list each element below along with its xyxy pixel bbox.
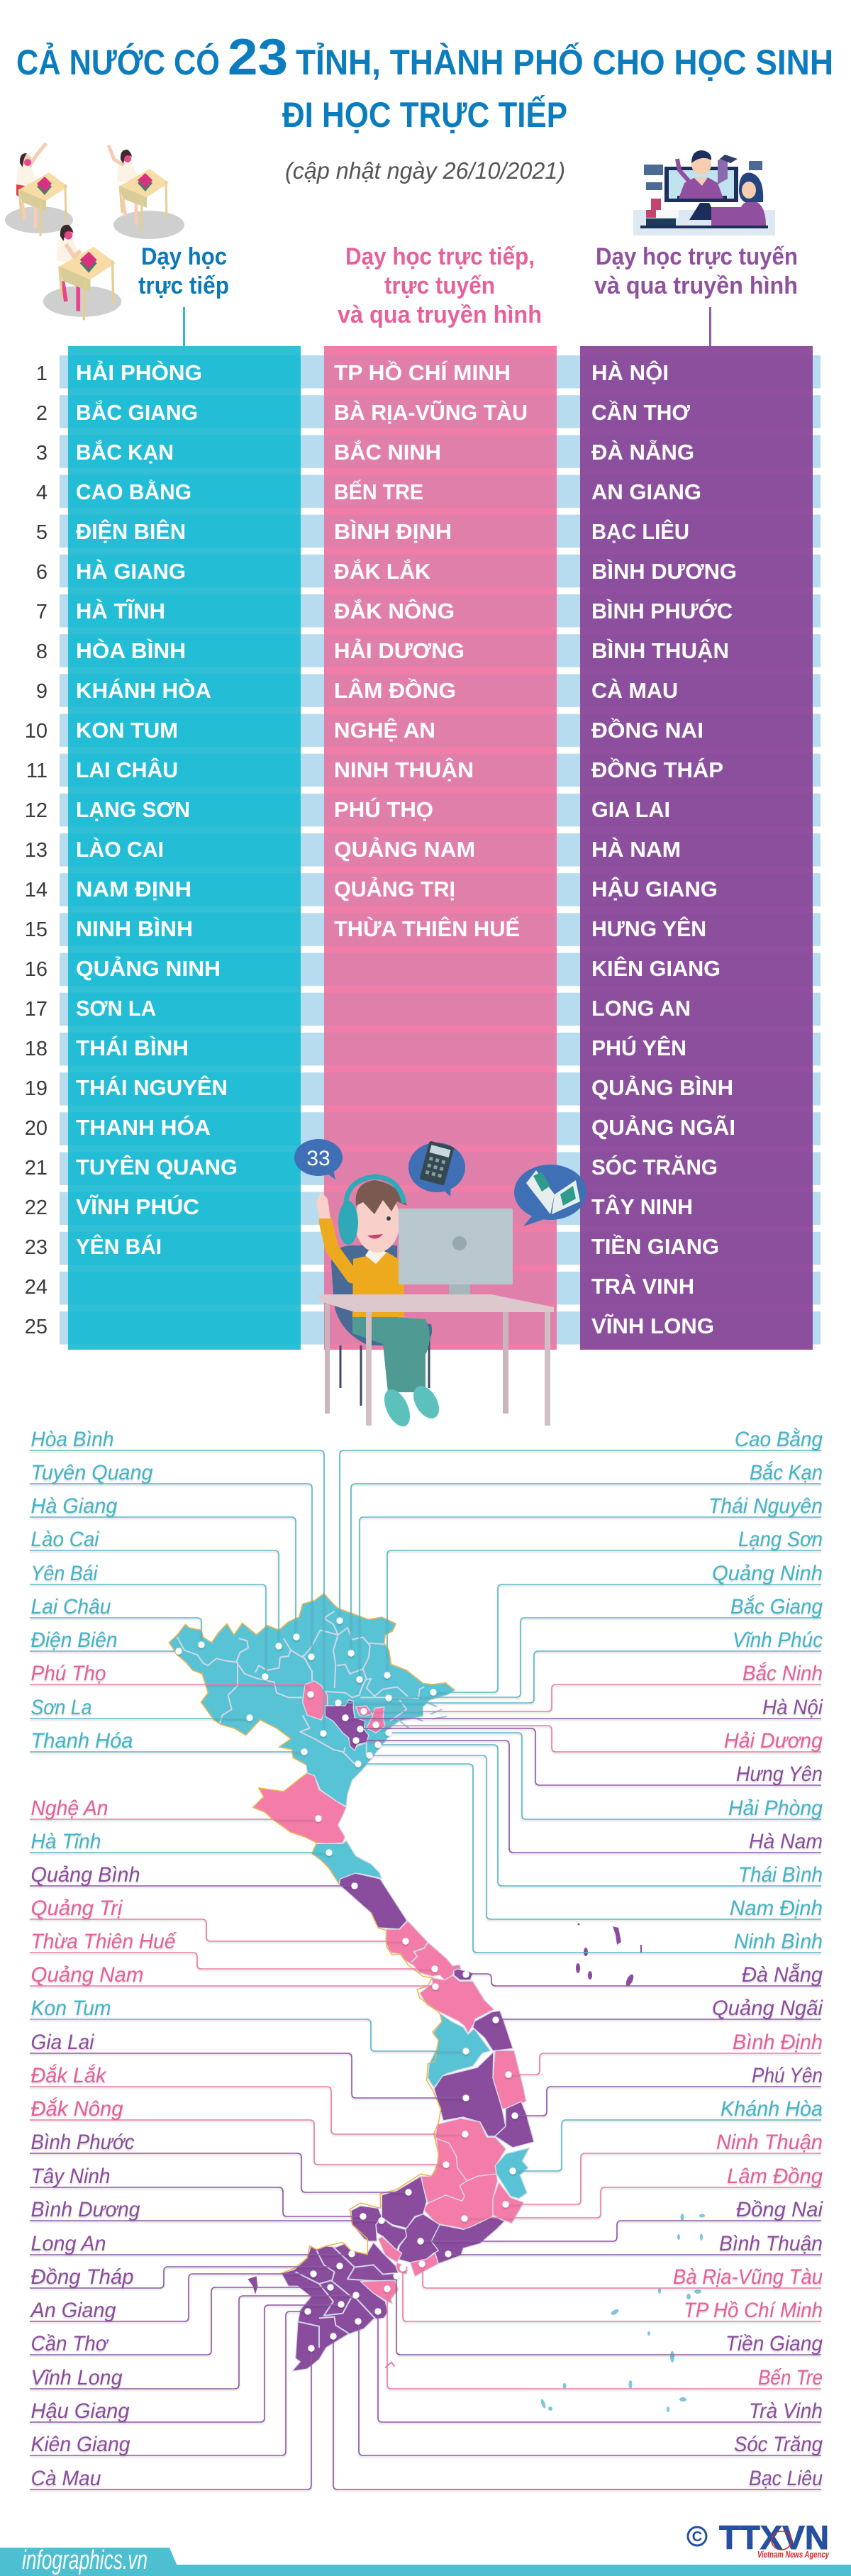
logo: TTXVN: C (692, 2529, 702, 2545)
label: Hậu Giang (30, 2301, 345, 2423)
label: Hà Tĩnh (30, 1830, 333, 1856)
label: Vĩnh Long (30, 2292, 360, 2389)
label: Gia Lai: Gia Lai (31, 2031, 95, 2054)
label: Ninh Thuận: Ninh Thuận (716, 2131, 823, 2154)
label: Thái Nguyên (356, 1494, 823, 1683)
label: Bắc Kạn: Bắc Kạn (750, 1461, 823, 1484)
panel: in-person provinces: TUYÊN QUANG (76, 1154, 238, 1179)
title (16, 29, 833, 135)
label: Trà Vinh: Trà Vinh (749, 2399, 823, 2423)
panel: online provinces: LONG AN (591, 996, 691, 1021)
column heading: in-person: Dạy học (141, 243, 227, 270)
label: Bình Thuận (445, 2232, 823, 2258)
panel: in-person provinces: VĨNH PHÚC (76, 1194, 199, 1219)
panel: online provinces: CÀ MAU (591, 678, 678, 703)
map legend: labels and leader lines (30, 1428, 823, 2490)
label: Bắc Giang: Bắc Giang (730, 1595, 823, 1619)
panel: in-person provinces: THÁI BÌNH (76, 1036, 189, 1060)
label: Kiên Giang: Kiên Giang (31, 2433, 130, 2456)
label: Đắk Nông: Đắk Nông (31, 2097, 123, 2121)
label: Quảng Ngãi: Quảng Ngãi (712, 1997, 823, 2020)
icon: book bubble (514, 1165, 586, 1226)
label: Phú Yên: Phú Yên (752, 2064, 823, 2087)
label: Thái Bình (374, 1741, 823, 1887)
row numbers: 15 (25, 918, 48, 941)
label: Quảng Ngãi (492, 1997, 823, 2023)
label: Bình Định (505, 2031, 823, 2078)
label: Bắc Kạn (347, 1461, 823, 1657)
title: CẢ NƯỚC CÓ (16, 43, 220, 82)
label: Sóc Trăng: Sóc Trăng (734, 2433, 823, 2456)
panel: online provinces: BÌNH PHƯỚC (591, 598, 733, 623)
label: Quảng Ninh (430, 1562, 823, 1696)
icon: student at desk, bottom (43, 225, 121, 320)
label: Bình Thuận: Bình Thuận (719, 2232, 823, 2255)
panel: blended provinces: PHÚ THỌ (334, 796, 433, 822)
panel: in-person provinces: HÀ GIANG (76, 559, 186, 584)
panel: in-person provinces: SƠN LA (76, 996, 156, 1021)
panel: online provinces: BẠC LIÊU (591, 518, 689, 544)
label: Ninh Thuận (502, 2131, 823, 2208)
panel: blended provinces: BẮC NINH (334, 439, 441, 465)
label: Bạc Liêu (330, 2333, 823, 2490)
label: Hà Tĩnh: Hà Tĩnh (31, 1830, 101, 1853)
panel: in-person provinces: HÀ TĨNH (76, 599, 165, 623)
panel: online provinces: KIÊN GIANG (591, 955, 721, 981)
label: Yên Bái: Yên Bái (31, 1562, 99, 1585)
label: Đắk Lắk (30, 2064, 469, 2138)
label: Tuyên Quang (30, 1461, 315, 1660)
label: Nam Định (366, 1752, 823, 1920)
row numbers: 24 (25, 1276, 48, 1299)
panel: blended provinces: ĐẮK LẮK (334, 558, 431, 584)
label: Sơn La: Sơn La (31, 1696, 92, 1719)
label: TP Hồ Chí Minh: TP Hồ Chí Minh (684, 2299, 823, 2322)
row numbers: 22 (25, 1197, 48, 1219)
label: Vĩnh Long: Vĩnh Long (31, 2366, 123, 2389)
label: Bà Rịa-Vũng Tàu (418, 2260, 823, 2289)
label: Cần Thơ (30, 2284, 334, 2355)
label: Cao Bằng: Cao Bằng (735, 1428, 823, 1451)
panel: blended provinces: LÂM ĐỒNG (334, 677, 456, 703)
label: Lào Cai: Lào Cai (31, 1528, 100, 1551)
label: Tây Ninh: Tây Ninh (31, 2165, 111, 2188)
label: Hà Nội (342, 1696, 823, 1721)
label: Phú Thọ (30, 1662, 314, 1698)
label: Hà Nam: Hà Nam (749, 1830, 823, 1853)
label: Long An: Long An (31, 2232, 106, 2255)
label: Bà Rịa-Vũng Tàu: Bà Rịa-Vũng Tàu (673, 2265, 823, 2289)
label: Đồng Tháp (30, 2263, 343, 2289)
map: northern provinces (169, 1594, 455, 1884)
panel: online provinces: BÌNH THUẬN (591, 638, 729, 663)
label: Phú Thọ: Phú Thọ (31, 1662, 106, 1685)
label: Kiên Giang (30, 2308, 311, 2456)
panel: online provinces: QUẢNG NGÃI (591, 1115, 735, 1140)
label: Thanh Hóa (30, 1729, 308, 1755)
label: Hải Phòng (385, 1729, 823, 1820)
panel: in-person provinces: QUẢNG NINH (76, 956, 221, 981)
panel: online provinces: HƯNG YÊN (591, 916, 706, 941)
label: Bến Tre: Bến Tre (758, 2366, 823, 2389)
title: ĐI HỌC TRỰC TIẾP (282, 95, 567, 135)
panel: in-person provinces: LAI CHÂU (76, 757, 178, 782)
label: Nghệ An (30, 1797, 322, 1822)
panel: in-person provinces: BẮC GIANG (76, 399, 198, 425)
panel: in-person provinces: HÒA BÌNH (76, 638, 186, 663)
panel: blended provinces: NINH THUẬN (334, 757, 474, 782)
panel: blended provinces: QUẢNG NAM (334, 837, 475, 862)
label: Đà Nẵng (462, 1963, 823, 1987)
label: Quảng Bình (30, 1863, 358, 1889)
icon: online teacher and student (633, 150, 775, 235)
label: Trà Vinh (374, 2308, 823, 2423)
label: Kon Tum: Kon Tum (31, 1997, 111, 2020)
label: Bình Phước (30, 2131, 412, 2196)
label: Bạc Liêu: Bạc Liêu (749, 2467, 823, 2490)
row numbers: 14 (25, 879, 48, 901)
panel: blended provinces: BẾN TRE (334, 479, 423, 504)
map: southern provinces (247, 2090, 530, 2371)
label: Cà Mau: Cà Mau (31, 2467, 101, 2490)
label: Lâm Đồng: Lâm Đồng (727, 2165, 823, 2188)
label: Bình Dương: Bình Dương (31, 2198, 140, 2221)
column heading: blended: trực tuyến (384, 272, 495, 299)
label: Hà Nam (352, 1737, 823, 1853)
row numbers: 5 (36, 521, 48, 544)
panel: online provinces: HÀ NAM (591, 837, 681, 862)
illustration: child studying at computer (294, 1139, 586, 1431)
label: Tiền Giang: Tiền Giang (725, 2332, 823, 2355)
panel: online provinces: AN GIANG (591, 479, 701, 504)
label: Lai Châu: Lai Châu (31, 1595, 111, 1619)
label: Khánh Hòa (509, 2097, 823, 2175)
label: Gia Lai (30, 2031, 469, 2102)
column heading: online (594, 243, 798, 299)
label: Phú Yên (511, 2064, 823, 2119)
panel: online provinces (580, 346, 813, 1350)
label: An Giang: An Giang (30, 2299, 116, 2322)
label: Vĩnh Phúc (335, 1628, 823, 1706)
panel: blended provinces: THỪA THIÊN HUẾ (334, 916, 520, 941)
panel: blended provinces: HẢI DƯƠNG (334, 638, 465, 663)
icon: speech bubble with 33: 33 (306, 1147, 330, 1170)
label: Bình Phước: Bình Phước (31, 2131, 135, 2154)
label: Hải Phòng: Hải Phòng (728, 1797, 823, 1820)
panel: online provinces: HẬU GIANG (591, 876, 718, 901)
label: Tiền Giang (393, 2272, 823, 2355)
panel: in-person provinces: KON TUM (76, 718, 178, 743)
row numbers: 1 (36, 362, 48, 385)
row numbers: 3 (36, 442, 48, 465)
label: Kon Tum (30, 1997, 469, 2055)
panel: in-person provinces: HẢI PHÒNG (76, 360, 202, 385)
connector stem: in-person (183, 307, 185, 346)
panel: in-person provinces: NAM ĐỊNH (76, 877, 191, 901)
label: Hải Dương: Hải Dương (724, 1729, 823, 1753)
panel: online provinces: TIỀN GIANG (591, 1234, 719, 1259)
row numbers: 25 (25, 1316, 48, 1338)
label: Hưng Yên: Hưng Yên (736, 1762, 823, 1786)
icon: calculator bubble (408, 1140, 465, 1197)
label: Thái Bình: Thái Bình (738, 1863, 823, 1887)
row numbers: 20 (25, 1117, 48, 1140)
panel: online provinces: BÌNH DƯƠNG (591, 559, 737, 584)
panel: online provinces: PHÚ YÊN (591, 1035, 686, 1060)
label: Bình Định: Bình Định (733, 2031, 823, 2054)
row numbers: 9 (36, 680, 48, 703)
computer monitor (399, 1209, 513, 1301)
label: Hà Giang: Hà Giang (31, 1494, 118, 1518)
label: Quảng Bình: Quảng Bình (31, 1863, 140, 1887)
map of Vietnam (169, 1594, 705, 2412)
label: Nghệ An: Nghệ An (31, 1797, 108, 1820)
panel: in-person provinces: YÊN BÁI (76, 1233, 162, 1259)
row numbers: 21 (25, 1157, 48, 1179)
row numbers: 6 (36, 561, 48, 584)
desk (318, 1294, 554, 1426)
label: Quảng Nam (30, 1963, 439, 1990)
row numbers: 13 (25, 839, 48, 862)
label: Hòa Bình: Hòa Bình (31, 1428, 113, 1451)
row numbers: 11 (26, 760, 48, 782)
label: Lai Châu (30, 1595, 205, 1648)
icon: student at desk, top middle (109, 145, 184, 239)
logo: TTXVN: TTXVN (719, 2519, 829, 2556)
panel: online provinces: TRÀ VINH (591, 1274, 694, 1299)
label: Hà Nội: Hà Nội (762, 1696, 823, 1719)
label: Đồng Tháp: Đồng Tháp (31, 2265, 133, 2289)
islands: Trường Sa (540, 2214, 705, 2412)
row numbers: 23 (25, 1236, 48, 1259)
panel: in-person provinces: THANH HÓA (76, 1114, 211, 1140)
row numbers: 10 (25, 720, 48, 743)
label: Đắk Lắk: Đắk Lắk (31, 2064, 107, 2087)
label: Quảng Trị: Quảng Trị (31, 1897, 123, 1920)
row numbers: 8 (36, 640, 48, 663)
label: Nam Định: Nam Định (730, 1897, 823, 1920)
row numbers: 12 (25, 799, 48, 822)
label: Quảng Ninh: Quảng Ninh (712, 1562, 823, 1585)
row stripes (60, 355, 821, 1345)
column heading: blended: Dạy học trực tiếp, (345, 243, 535, 270)
subtitle: update date: (cập nhật ngày 26/10/2021) (285, 157, 565, 184)
map: central provinces (371, 1913, 513, 2090)
panel: in-person provinces: CAO BẰNG (76, 479, 191, 504)
row numbers: 4 (36, 482, 48, 504)
row numbers: 16 (25, 958, 48, 981)
panel: online provinces: SÓC TRĂNG (591, 1154, 718, 1179)
panel: online provinces: CẦN THƠ (591, 400, 691, 425)
label: Bến Tre (384, 2285, 823, 2389)
label: Hải Dương (372, 1721, 823, 1753)
label: Đồng Nai: Đồng Nai (736, 2198, 823, 2221)
panel: blended provinces: QUẢNG TRỊ (334, 877, 455, 901)
column heading: in-person: trực tiếp (138, 272, 229, 299)
child figure (316, 1177, 444, 1431)
label: Thừa Thiên Huế (30, 1930, 438, 1972)
label: Bình Dương (30, 2198, 385, 2224)
islands: Hoàng Sa (576, 1923, 642, 1987)
label: Sóc Trăng (355, 2318, 823, 2456)
label: Đắk Nông (30, 2097, 450, 2168)
label: Bắc Giang (385, 1595, 823, 1701)
label: Thái Nguyên: Thái Nguyên (708, 1494, 823, 1518)
panel: in-person provinces: THÁI NGUYÊN (76, 1075, 228, 1100)
label: Cao Bằng (336, 1428, 823, 1624)
footer bar: infographics.vn (22, 2546, 148, 2575)
panel: online provinces: HÀ NỘI (591, 360, 669, 385)
panel: in-person provinces (68, 346, 301, 1350)
panel: in-person provinces: KHÁNH HÒA (76, 677, 211, 703)
map: north central provinces (339, 1873, 407, 1929)
label: Ninh Bình: Ninh Bình (734, 1930, 823, 1953)
panel: online provinces: VĨNH LONG (591, 1314, 714, 1338)
panel: online provinces: TÂY NINH (591, 1194, 693, 1219)
panel: in-person provinces: ĐIỆN BIÊN (76, 518, 186, 544)
label: TP Hồ Chí Minh (399, 2265, 823, 2322)
label: Ninh Bình (355, 1760, 823, 1953)
label: Vĩnh Phúc: Vĩnh Phúc (733, 1628, 823, 1652)
column heading: online: và qua truyền hình (594, 272, 798, 299)
panel: in-person provinces: LẠNG SƠN (76, 797, 190, 822)
panel: in-person provinces: NINH BÌNH (76, 916, 193, 941)
icon: speech bubble with 33 (294, 1139, 343, 1179)
column heading: blended (338, 243, 542, 328)
label: Lạng Sơn (384, 1528, 823, 1679)
chair (331, 1245, 432, 1406)
panel: blended provinces (324, 346, 557, 1350)
label: Quảng Nam: Quảng Nam (31, 1963, 143, 1987)
label: Bắc Ninh: Bắc Ninh (742, 1662, 823, 1685)
footer bar (0, 2546, 851, 2576)
label: Khánh Hòa: Khánh Hòa (721, 2097, 823, 2121)
label: Sơn La (30, 1696, 253, 1721)
panel: blended provinces: BÌNH ĐỊNH (334, 519, 452, 544)
label: Đà Nẵng: Đà Nẵng (742, 1963, 823, 1987)
label: Hòa Bình (30, 1428, 327, 1737)
label: Thừa Thiên Huế: Thừa Thiên Huế (31, 1930, 177, 1953)
label: Đồng Nai (417, 2198, 823, 2245)
column heading: online: Dạy học trực tuyến (596, 243, 798, 270)
label: Long An (30, 2232, 355, 2258)
icon: student at desk, top left (5, 143, 73, 236)
connector stem: online (709, 307, 711, 346)
column heading: blended: và qua truyền hình (338, 301, 542, 328)
row numbers: 17 (25, 998, 48, 1021)
label: Cà Mau (30, 2345, 315, 2490)
label: Hưng Yên (357, 1726, 823, 1786)
label: Tuyên Quang: Tuyên Quang (31, 1461, 153, 1484)
label: Hậu Giang: Hậu Giang (31, 2399, 130, 2423)
panel: blended provinces: ĐẮK NÔNG (334, 598, 455, 623)
row numbers: 19 (25, 1077, 48, 1100)
panel: online provinces: ĐỒNG NAI (591, 717, 703, 743)
panel: online provinces: GIA LAI (591, 797, 670, 822)
column heading: in-person (138, 243, 229, 299)
panel: blended provinces: NGHỆ AN (334, 717, 435, 743)
label: Lạng Sơn: Lạng Sơn (738, 1528, 823, 1551)
label: Quảng Trị (30, 1897, 409, 1945)
label: Lào Cai (30, 1528, 282, 1650)
row numbers (25, 362, 48, 1338)
label: Lâm Đồng (461, 2165, 823, 2222)
label: Điện Biên (30, 1628, 182, 1655)
panel: online provinces: QUẢNG BÌNH (591, 1075, 733, 1100)
row numbers: 18 (25, 1038, 48, 1060)
row numbers: 7 (36, 601, 48, 623)
label: Cần Thơ: Cần Thơ (31, 2332, 109, 2355)
label: Thanh Hóa: Thanh Hóa (31, 1729, 133, 1753)
row numbers: 2 (36, 402, 48, 425)
panel: blended provinces: BÀ RỊA-VŨNG TÀU (334, 399, 528, 425)
label: Điện Biên: Điện Biên (31, 1628, 118, 1652)
panel: online provinces: ĐỒNG THÁP (591, 757, 723, 782)
panel: blended provinces: TP HỒ CHÍ MINH (334, 360, 511, 385)
label: An Giang (30, 2270, 317, 2322)
panel: in-person provinces: BẮC KẠN (76, 439, 174, 465)
panel: in-person provinces: LÀO CAI (76, 837, 164, 862)
label: Bắc Ninh (360, 1662, 823, 1715)
label: Tây Ninh (30, 2165, 367, 2220)
title: 23 (228, 29, 288, 86)
label: Hà Giang (30, 1494, 300, 1640)
label: Yên Bái (30, 1562, 269, 1680)
panel: online provinces: ĐÀ NẴNG (591, 439, 694, 465)
map: central highlands (434, 2050, 534, 2148)
